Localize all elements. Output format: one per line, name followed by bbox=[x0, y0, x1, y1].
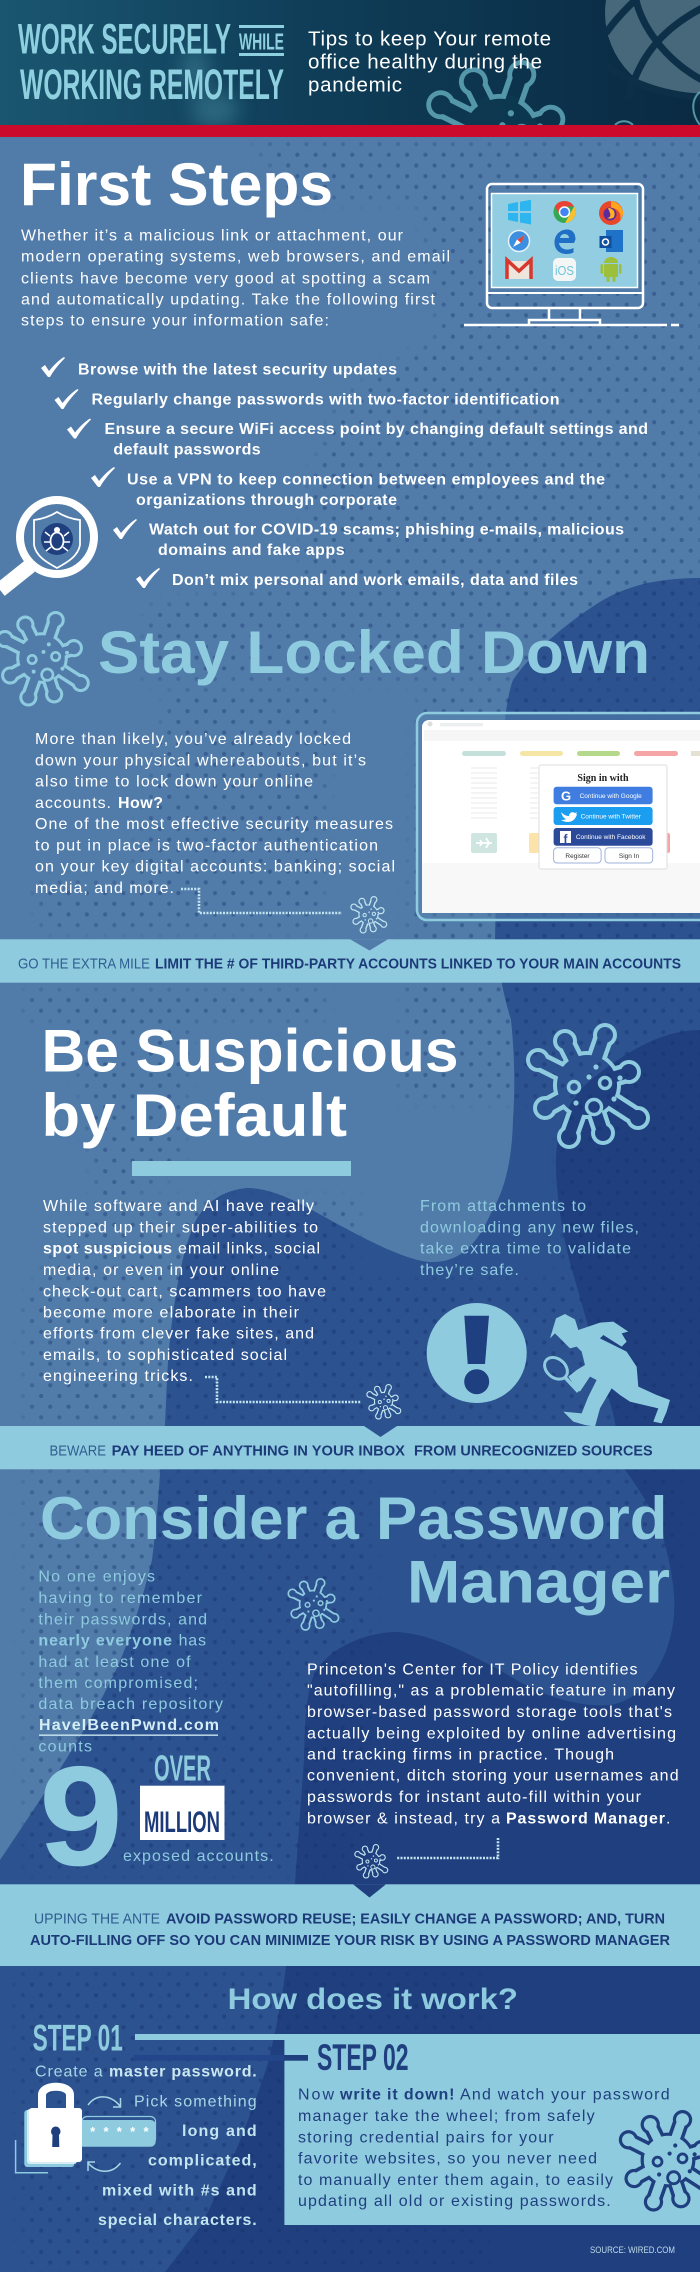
banner: beware: PAY HEED OF ANYTHING IN YOUR INBOX bbox=[112, 1444, 405, 1460]
icon: android bbox=[600, 257, 622, 282]
step 02 text: to manually enter them again, to easily bbox=[298, 2172, 613, 2189]
arrow: top bbox=[88, 2097, 120, 2107]
heading: Be Suspicious by Default: by Default bbox=[42, 1082, 347, 1149]
icon: virus mid bbox=[284, 1575, 342, 1633]
step 01 side text: mixed with #s and bbox=[102, 2182, 257, 2199]
banner: go the extra mile bbox=[0, 939, 700, 983]
paragraph: no one enjoys: their passwords, and bbox=[38, 1611, 207, 1628]
paragraph: stay locked down: accounts. bbox=[35, 795, 111, 812]
subtitle: Tips to keep Your remote bbox=[308, 27, 551, 50]
paragraph: no one enjoys: No one enjoys bbox=[38, 1569, 155, 1586]
banner: upping the ante: AUTO-FILLING OFF SO YOU CAN MINIMIZE YOUR RISK BY USING A PASSWORD MANAGER bbox=[30, 1933, 671, 1949]
item 1: Browse with the latest security updates bbox=[78, 362, 397, 379]
subtitle bbox=[308, 27, 551, 97]
twitter button: Continue with Twitter bbox=[581, 814, 642, 820]
google button: G bbox=[561, 788, 571, 804]
paragraph: princeton: passwords for instant auto-fill within your bbox=[307, 1789, 642, 1806]
subtitle: pandemic bbox=[308, 74, 402, 97]
intro paragraph: and automatically updating. Take the following first bbox=[21, 291, 436, 308]
step 02 text bbox=[298, 2086, 670, 2210]
title: WORK SECURELY bbox=[18, 16, 231, 64]
step 01 lead bbox=[35, 2064, 257, 2081]
step 02 text: And watch your password bbox=[460, 2086, 670, 2103]
paragraph: no one enjoys: has bbox=[179, 1633, 206, 1650]
item 5: domains and fake apps bbox=[158, 542, 345, 559]
paragraph: stay locked down: One of the most effective security measures bbox=[35, 816, 393, 833]
intro paragraph: clients have become very good at spotting a scam bbox=[21, 270, 430, 287]
icon: ios bbox=[553, 258, 576, 281]
icon: padlock with password field bbox=[16, 2087, 156, 2173]
icon: large virus bbox=[517, 1015, 657, 1155]
step 02 text: manager take the wheel; from safely bbox=[298, 2108, 595, 2125]
heading: Consider a Password Manager: Manager bbox=[407, 1548, 670, 1615]
paragraph: be suspicious left: emails, to sophisticated social bbox=[43, 1347, 287, 1364]
item 3 bbox=[67, 418, 648, 459]
step 02 text: updating all old or existing passwords. bbox=[298, 2193, 611, 2210]
icon: firefox bbox=[599, 201, 623, 225]
paragraph: princeton: convenient, ditch storing your usernames and bbox=[307, 1768, 679, 1785]
icon: windows bbox=[508, 200, 531, 224]
paragraph: princeton bbox=[307, 1661, 679, 1827]
step 02 text: storing credential pairs for your bbox=[298, 2129, 554, 2146]
icon: virus left of Stay Locked Down bbox=[0, 605, 95, 711]
facebook button: f bbox=[564, 832, 568, 846]
title: WHILE bbox=[239, 28, 284, 54]
paragraph: no one enjoys: them compromised; bbox=[38, 1675, 198, 1692]
paragraph: be suspicious left: While software and AI have really bbox=[43, 1198, 314, 1215]
sign-in card: Sign in with bbox=[577, 773, 629, 784]
icon: detective silhouette bbox=[540, 1314, 670, 1427]
google button: Continue with Google bbox=[580, 793, 642, 800]
icon: padlock with password field: * bbox=[90, 2124, 96, 2139]
step 01 side text: long and bbox=[182, 2123, 257, 2140]
paragraph: be suspicious left: stepped up their super-abilities to bbox=[43, 1219, 318, 1236]
paragraph: stay locked down: media; and more. bbox=[35, 880, 174, 897]
item 4: Use a VPN to keep connection between employees and the bbox=[127, 471, 605, 488]
item 4: organizations through corporate bbox=[136, 492, 397, 509]
paragraph: stay locked down: How? bbox=[118, 795, 163, 812]
icon: exclamation circle bbox=[427, 1303, 527, 1403]
step 01 heading: STEP 01 bbox=[33, 2018, 123, 2059]
heading: Consider a Password Manager bbox=[40, 1485, 670, 1615]
paragraph: stay locked down: down your physical whereabouts, but it’s bbox=[35, 752, 366, 769]
checklist bbox=[41, 357, 648, 589]
step 01 bbox=[16, 2018, 257, 2229]
browser sign-in screenshot bbox=[417, 713, 700, 920]
paragraph: no one enjoys: had at least one of bbox=[38, 1654, 191, 1671]
icon: virus in step 02 bbox=[612, 2104, 700, 2216]
paragraph: stay locked down: More than likely, you’ve already locked bbox=[35, 731, 351, 748]
item 2: Regularly change passwords with two-factor identification bbox=[92, 391, 560, 408]
paragraph: princeton: and tracking firms in practice. Though bbox=[307, 1746, 614, 1763]
paragraph: no one enjoys bbox=[38, 1569, 223, 1756]
icon: outlook bbox=[600, 230, 623, 252]
sign in button: Sign In bbox=[619, 853, 639, 860]
subtitle: office healthy during the bbox=[308, 50, 542, 74]
paragraph: princeton: Princeton's Center for IT Policy identifies bbox=[307, 1661, 638, 1678]
step 01 side text: Pick something bbox=[134, 2094, 257, 2111]
paragraph: be suspicious right: they’re safe. bbox=[420, 1262, 519, 1279]
icon: header virus bbox=[426, 60, 700, 125]
icon: padlock with password field: * bbox=[130, 2124, 136, 2139]
source: SOURCE: WIRED.COM bbox=[590, 2245, 675, 2256]
arrow: bottom bbox=[88, 2162, 120, 2171]
paragraph: be suspicious left: become more elaborate in their bbox=[43, 1304, 300, 1321]
banner: go the extra mile: LIMIT THE # OF THIRD-PARTY ACCOUNTS LINKED TO YOUR MAIN ACCOUNTS bbox=[155, 957, 681, 973]
paragraph: no one enjoys: data breach repository bbox=[38, 1696, 223, 1713]
paragraph: princeton: . bbox=[666, 1810, 670, 1827]
paragraph: no one enjoys: counts bbox=[38, 1739, 92, 1756]
icon: small virus bbox=[352, 1842, 390, 1880]
paragraph: princeton: browser-based password storage tools that's bbox=[307, 1704, 672, 1721]
banner: upping the ante: UPPING THE ANTE bbox=[34, 1911, 160, 1927]
paragraph: stay locked down bbox=[35, 731, 395, 897]
intro paragraph: Whether it’s a malicious link or attachment, our bbox=[21, 228, 404, 245]
banner: beware: BEWARE bbox=[50, 1444, 106, 1460]
dotted connector 2 bbox=[205, 1377, 403, 1421]
paragraph: be suspicious left: spot suspicious bbox=[43, 1241, 172, 1258]
paragraph: be suspicious right: From attachments to bbox=[420, 1198, 586, 1215]
icon: safari bbox=[508, 230, 530, 252]
step 02 heading: STEP 02 bbox=[317, 2037, 408, 2078]
icon: gmail bbox=[507, 260, 531, 279]
stat: over 9 million: OVER bbox=[154, 1748, 211, 1789]
paragraph: no one enjoys: HaveIBeenPwnd.com bbox=[39, 1717, 219, 1734]
title bbox=[18, 16, 284, 109]
step 01 side text: complicated, bbox=[148, 2153, 257, 2170]
heading: First Steps: First Steps bbox=[20, 151, 333, 218]
paragraph: no one enjoys: having to remember bbox=[38, 1590, 203, 1607]
step 02 text: write it down! bbox=[339, 2086, 454, 2103]
dotted connector 1 bbox=[181, 889, 389, 935]
paragraph: stay locked down: on your key digital accounts: banking; social bbox=[35, 859, 395, 876]
icon: edge bbox=[554, 230, 576, 254]
banner: beware: FROM UNRECOGNIZED SOURCES bbox=[414, 1444, 653, 1460]
heading: Be Suspicious by Default: Be Suspicious bbox=[42, 1018, 458, 1085]
step 01 lead: master password. bbox=[109, 2064, 257, 2081]
step 02 text: favorite websites, so you never need bbox=[298, 2150, 597, 2167]
paragraph: be suspicious left: email links, social bbox=[178, 1241, 320, 1258]
google button bbox=[554, 787, 653, 804]
facebook button bbox=[554, 828, 653, 846]
paragraph: princeton: "autofilling," as a problematic feature in many bbox=[307, 1683, 675, 1700]
paragraph: stay locked down: also time to lock down your online bbox=[35, 774, 313, 791]
item 4 bbox=[91, 467, 605, 509]
paragraph: be suspicious left: efforts from clever fake sites, and bbox=[43, 1326, 314, 1343]
icon: globe bbox=[605, 0, 700, 100]
heading: Stay Locked Down: Stay Locked Down bbox=[98, 619, 650, 686]
icon: padlock with password field: * bbox=[117, 2124, 123, 2139]
intro paragraph: steps to ensure your information safe: bbox=[21, 313, 329, 330]
step 02 text: Now bbox=[298, 2086, 334, 2103]
paragraph: stay locked down: to put in place is two-factor authentication bbox=[35, 837, 378, 854]
stat: over 9 million bbox=[39, 1737, 274, 1896]
item 3: Ensure a secure WiFi access point by changing default settings and bbox=[104, 421, 648, 438]
item 5: Watch out for COVID-19 scams; phishing e-mails, malicious bbox=[149, 522, 624, 539]
step 01 side text: special characters. bbox=[98, 2212, 257, 2229]
heading: How does it work: How does it work? bbox=[228, 1983, 518, 2016]
paragraph: princeton: actually being exploited by online advertising bbox=[307, 1725, 676, 1742]
step 01 lead: Create a bbox=[35, 2064, 103, 2081]
icon: small virus bbox=[364, 1382, 403, 1421]
step 02 panel bbox=[134, 2034, 700, 2225]
facebook button: Continue with Facebook bbox=[576, 834, 646, 841]
intro paragraph: modern operating systems, web browsers, and email bbox=[21, 249, 450, 266]
stat: over 9 million: 9 bbox=[39, 1737, 123, 1896]
icon: padlock with password field: * bbox=[103, 2124, 109, 2139]
heading: Consider a Password Manager: Consider a Password bbox=[40, 1485, 668, 1552]
stat: over 9 million: exposed accounts. bbox=[123, 1848, 274, 1865]
intro paragraph bbox=[21, 228, 450, 330]
dotted connector 3 bbox=[352, 1838, 498, 1880]
icon: chrome bbox=[554, 201, 576, 223]
item 6: Don’t mix personal and work emails, data and files bbox=[172, 572, 578, 589]
accent bar bbox=[132, 1161, 351, 1176]
register button: Register bbox=[565, 853, 590, 860]
banner: upping the ante: AVOID PASSWORD REUSE; EASILY CHANGE A PASSWORD; AND, TURN bbox=[166, 1911, 665, 1927]
paragraph: be suspicious right: downloading any new files, bbox=[420, 1219, 639, 1236]
step 01 side text bbox=[98, 2094, 257, 2229]
paragraph: be suspicious left: check-out cart, scammers too have bbox=[43, 1283, 326, 1300]
paragraph: be suspicious left: media, or even in your online bbox=[43, 1262, 279, 1279]
item 3: default passwords bbox=[113, 442, 261, 459]
paragraph: be suspicious left: engineering tricks. bbox=[43, 1368, 193, 1385]
red divider band bbox=[0, 125, 700, 137]
paragraph: princeton: Password Manager bbox=[506, 1810, 665, 1827]
icon: padlock with password field: * bbox=[143, 2124, 149, 2139]
paragraph: princeton: browser & instead, try a bbox=[307, 1810, 500, 1827]
banner: go the extra mile: GO THE EXTRA MILE bbox=[18, 957, 150, 973]
banner: beware bbox=[0, 1426, 700, 1469]
paragraph: be suspicious right bbox=[420, 1198, 639, 1279]
stat: over 9 million: MILLION bbox=[144, 1806, 220, 1839]
sign-in card bbox=[539, 765, 667, 869]
icon: small virus bbox=[348, 894, 389, 935]
paragraph: no one enjoys: nearly everyone bbox=[38, 1633, 172, 1650]
title: WORKING REMOTELY bbox=[20, 61, 284, 109]
icon: magnifier with shield and bug bbox=[0, 500, 94, 590]
blurred dna motif bbox=[181, 48, 239, 128]
paragraph: be suspicious right: take extra time to validate bbox=[420, 1241, 631, 1258]
icon: desktop monitor with app logos bbox=[464, 184, 679, 325]
icon: ios: iOS bbox=[555, 263, 574, 278]
header banner bbox=[0, 0, 700, 125]
paragraph: be suspicious left bbox=[43, 1198, 326, 1385]
banner: upping the ante bbox=[0, 1884, 700, 1966]
heading: Be Suspicious by Default bbox=[42, 1018, 458, 1149]
item 5 bbox=[113, 519, 624, 559]
